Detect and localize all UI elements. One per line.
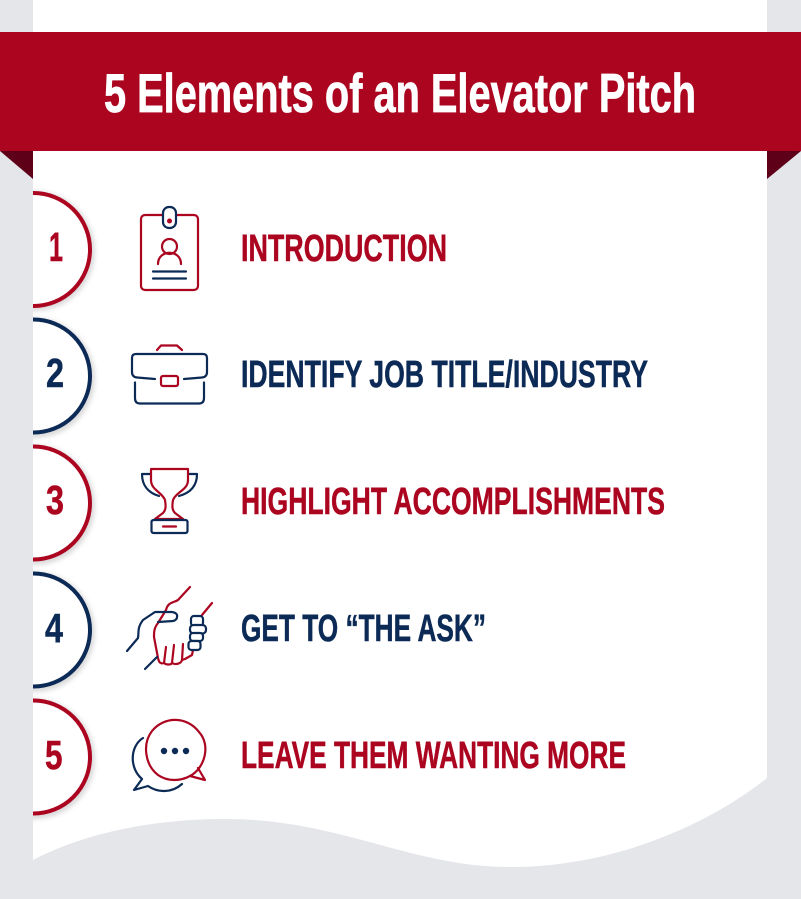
step 5 label: LEAVE THEM WANTING MORE	[241, 735, 626, 777]
step 3 number circle	[33, 444, 96, 566]
right ribbon fold	[767, 151, 801, 179]
step 4 number circle	[33, 570, 96, 694]
step 4 label: GET TO “THE ASK”	[241, 608, 486, 650]
step 1 number circle	[33, 190, 96, 312]
icon: id badge	[141, 207, 198, 290]
step 5 number circle	[33, 698, 96, 820]
step 3 number circle: 3	[46, 477, 64, 523]
step 5 number circle: 5	[45, 732, 62, 778]
step 1 number circle: 1	[49, 224, 63, 270]
icon: briefcase	[132, 346, 207, 404]
icon: speech bubbles	[133, 720, 205, 791]
step 2 number circle	[33, 316, 96, 440]
step 2 number circle: 2	[46, 350, 64, 396]
left ribbon fold	[0, 151, 33, 179]
icon: handshake	[127, 587, 212, 669]
step 1 label: INTRODUCTION	[241, 228, 447, 270]
icon: trophy	[142, 469, 197, 533]
title ribbon	[0, 32, 801, 151]
step 4 number circle: 4	[45, 605, 63, 651]
